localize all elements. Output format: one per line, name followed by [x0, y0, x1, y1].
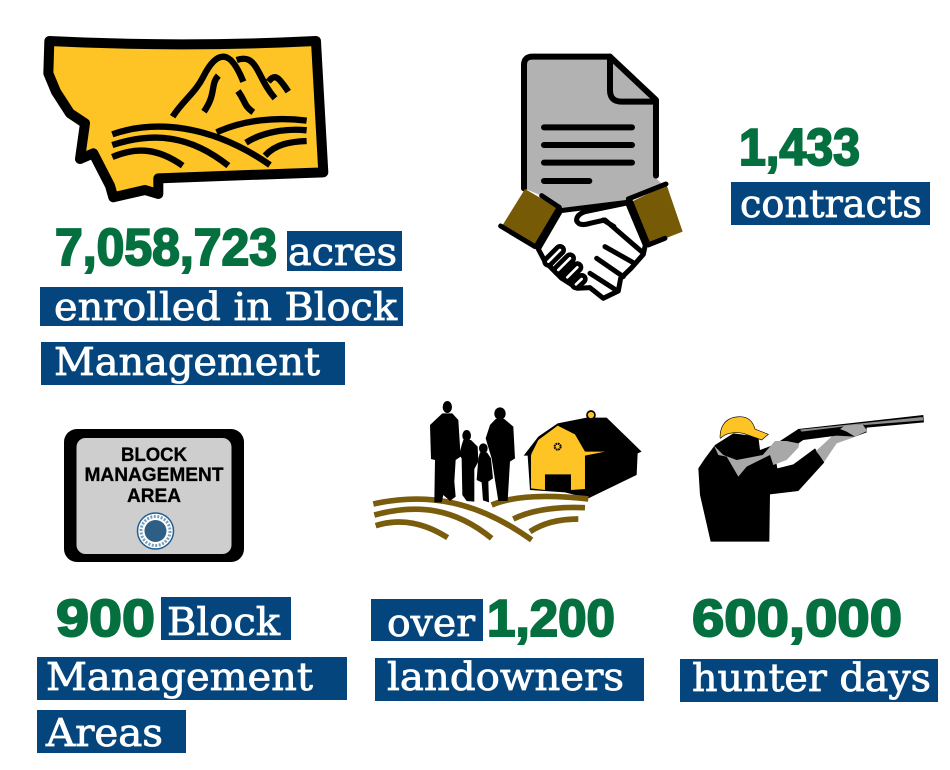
fields: [373, 496, 588, 540]
stat: 1,433 contracts: contracts: [740, 182, 922, 226]
stat: 900 Block Management Areas: [37, 590, 347, 755]
stat: 7,058,723 acres enrolled in Block Management: enrolled in Block: [54, 285, 398, 329]
icon: agency seal: [138, 513, 174, 549]
stat: 1,433 contracts: 1,433: [739, 119, 860, 177]
stat: 600,000 hunter days: hunter days: [692, 656, 931, 700]
icon: Block Management Area sign: [64, 429, 244, 562]
stat: 900 Block Management Areas: Management: [46, 655, 313, 699]
stat: 1,433 contracts: [731, 119, 930, 226]
stat: over 1,200 landowners: landowners: [387, 655, 624, 699]
stat: over 1,200 landowners: 1,200: [487, 590, 615, 648]
icon: contract document and handshake: [501, 57, 683, 298]
daughter: [479, 443, 488, 453]
stat: 7,058,723 acres enrolled in Block Management: 7,058,723: [55, 219, 277, 277]
stat: over 1,200 landowners: [371, 590, 644, 701]
stat: over 1,200 landowners: over: [387, 601, 476, 645]
stat: 7,058,723 acres enrolled in Block Management: [40, 219, 403, 385]
stat: 600,000 hunter days: 600,000: [692, 590, 902, 648]
son: [462, 430, 471, 441]
stat: 600,000 hunter days: [680, 590, 938, 702]
icon: family and barn on fields: [373, 401, 642, 540]
icon: Montana map with mountain and fields: [48, 41, 323, 197]
icon: Block Management Area sign: AREA: [127, 486, 181, 507]
stat: 7,058,723 acres enrolled in Block Management: Management: [54, 340, 320, 384]
icon: hunter aiming shotgun: [698, 415, 924, 542]
father: [443, 401, 452, 413]
stat: 900 Block Management Areas: Areas: [45, 711, 163, 755]
stat: 900 Block Management Areas: Block: [167, 600, 281, 644]
icon: Block Management Area sign: BLOCK: [121, 445, 187, 466]
stat: 7,058,723 acres enrolled in Block Management: acres: [288, 230, 397, 274]
barn: [524, 418, 642, 498]
mother: [494, 407, 506, 420]
icon: Block Management Area sign: MANAGEMENT: [84, 465, 224, 486]
stat: 900 Block Management Areas: 900: [56, 590, 155, 648]
